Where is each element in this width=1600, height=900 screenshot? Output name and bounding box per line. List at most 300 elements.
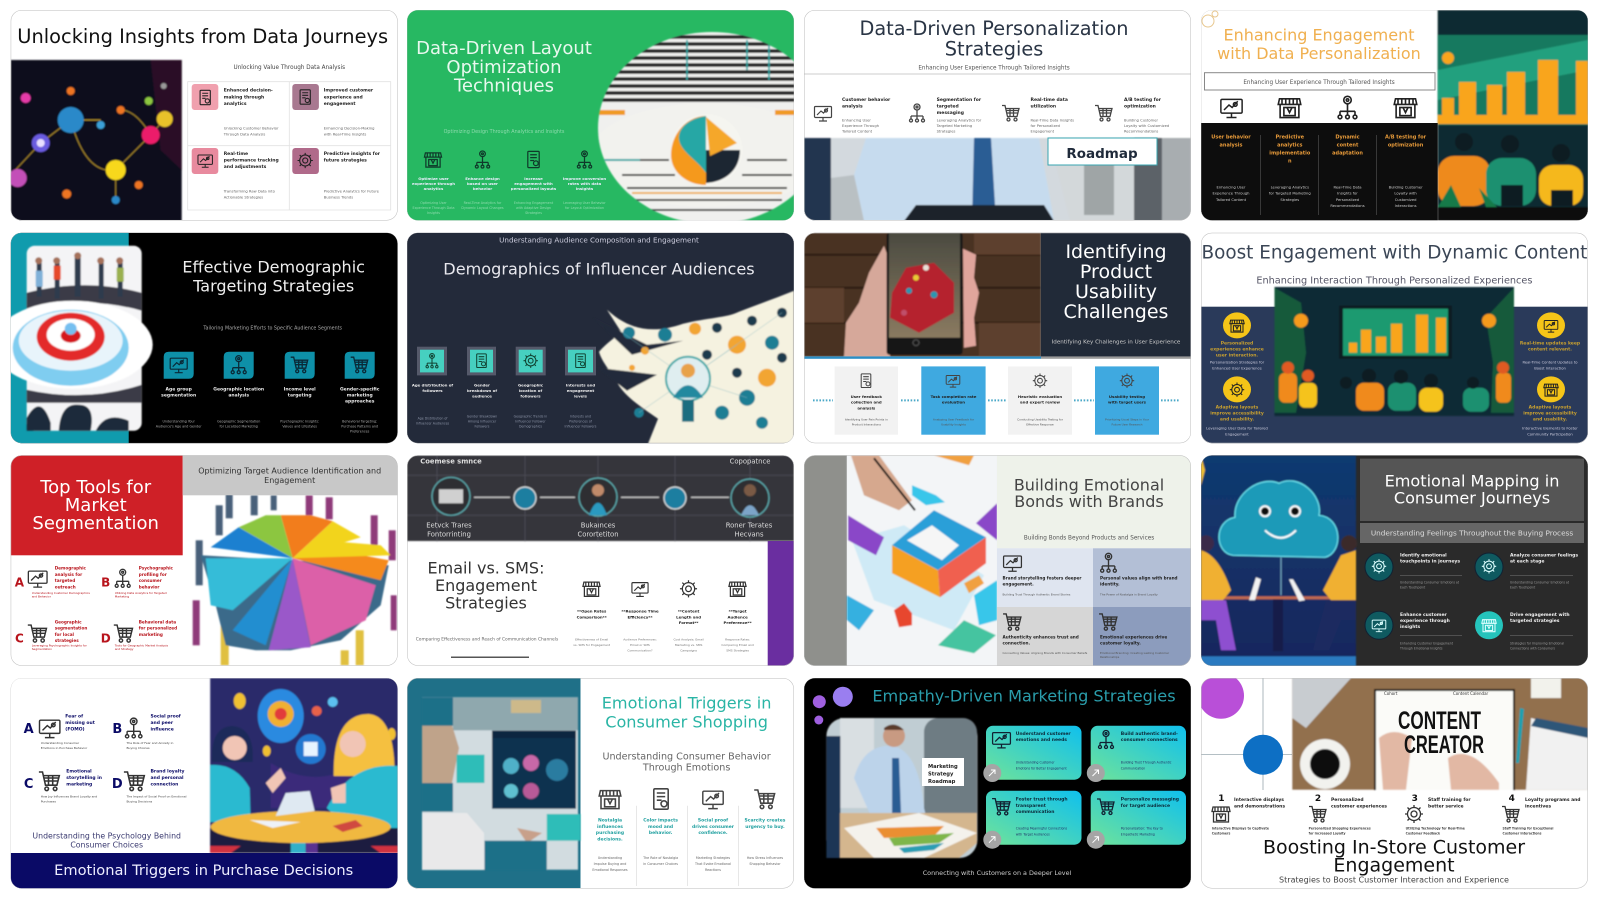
- dark panel with four columns: Insights for: [1337, 192, 1358, 196]
- value cells: Brand storytelling fosters deeper: [1002, 576, 1081, 581]
- tool items A-D: [15, 566, 177, 651]
- subtitle: Enhancing User Experience Through Tailored Insights: [918, 65, 1070, 71]
- strategy items: Engagement: [1030, 130, 1055, 134]
- strategy items: messaging: [937, 110, 964, 116]
- trigger items A-D: Social proof: [150, 714, 181, 719]
- steps: Increase: [524, 176, 543, 181]
- side items: Community Participation: [1527, 432, 1573, 436]
- strategy items: utilization: [1030, 104, 1056, 110]
- challenge cards: Effective Response: [1026, 422, 1054, 426]
- photo: flow diagram on dark wall: Coemese smnce: [420, 458, 482, 466]
- title area: [997, 455, 1191, 548]
- photo: flow diagram on dark wall: [407, 455, 794, 541]
- trigger items A-D: How Joy Influences Brand Loyalty and: [41, 794, 97, 798]
- demographic cards: Geographic Trends in: [514, 415, 547, 419]
- panel: Boost Engagement with Dynamic Content: [1201, 233, 1588, 444]
- trigger items A-D: connection: [151, 782, 178, 788]
- demographic cards: Influencer Follower: [515, 420, 546, 424]
- steps: analytics: [424, 186, 444, 191]
- strategy items: Tailored Content: [841, 130, 873, 134]
- numbered tactics: Customers: [1212, 831, 1230, 835]
- strategy cards: emotions and needs: [1016, 737, 1067, 743]
- tool items A-D: for personalized: [139, 626, 177, 631]
- journey items: experience through: [1400, 618, 1450, 624]
- title panel: Identifying Key Challenges in User Experience: [1052, 340, 1181, 346]
- panel: Data-Driven Personalization Strategies: [804, 10, 1191, 221]
- strategy items: A/B testing for: [1124, 98, 1161, 103]
- numbered tactics: Customer Interactions: [1502, 831, 1542, 835]
- title box: [1360, 459, 1584, 521]
- trigger items A-D: Emotional: [66, 769, 92, 774]
- journey items: Each Touchpoint: [1400, 586, 1426, 590]
- strategy labels: segmentation: [161, 393, 196, 399]
- title band: Emotional Triggers in Purchase Decisions: [54, 862, 353, 879]
- trigger items A-D: (FOMO): [65, 727, 85, 733]
- title panel: Usability: [1075, 281, 1157, 303]
- demographic cards: Age Distribution of: [418, 417, 447, 421]
- photo: content creator notebook on desk: Cohort: [1384, 691, 1398, 696]
- comparison items: Cost Analysis: Email: [673, 637, 704, 641]
- panel: Emotional Mapping in Consumer Journeys: [1198, 455, 1588, 666]
- challenge cards: Usability testing: [1109, 394, 1145, 399]
- photo: marketing strategy roadmap: Marketing: [928, 764, 958, 770]
- steps: with Adaptive Design: [516, 206, 551, 210]
- title: Engagement: [1333, 855, 1455, 877]
- trigger items A-D: influence: [151, 727, 174, 733]
- subtitle: Consumer Choices: [70, 841, 143, 850]
- tool items A-D: Demographic: [55, 566, 86, 571]
- subtitle: Optimizing Design Through Analytics and Insights: [444, 129, 565, 135]
- trigger columns: [592, 789, 786, 886]
- dark panel with four columns: Leveraging Analytics: [1271, 185, 1309, 189]
- steps: Experience Through Data: [412, 206, 455, 210]
- title: Strategies: [445, 594, 527, 613]
- demographic cards: [412, 347, 597, 429]
- strategy labels: Behavioral Targeting:: [342, 420, 377, 424]
- strategy labels: analysis: [228, 393, 249, 399]
- subtitle: Unlocking Value Through Data Analysis: [234, 65, 345, 71]
- strategy items: optimization: [1124, 104, 1156, 110]
- benefits grid: Actionable Strategies: [224, 196, 263, 200]
- trigger items A-D: C: [24, 777, 33, 792]
- value cells: Connecting Values: Aligning Brands with Consumer Beliefs: [1002, 651, 1088, 655]
- strategy cards: Build authentic brand-: [1121, 732, 1178, 737]
- dark panel with four columns: A/B testing for: [1385, 135, 1426, 141]
- comparison items: Communication?: [627, 649, 653, 653]
- strategy items: Customer behavior: [842, 98, 890, 103]
- journey items: Identify emotional: [1400, 554, 1447, 559]
- numbered tactics: Staff training for: [1428, 798, 1471, 803]
- title area: Building Bonds Beyond Products and Services: [1024, 536, 1154, 542]
- challenge cards: Identifying User Pain Points in: [845, 417, 888, 421]
- trigger items A-D: Purchases: [41, 799, 56, 803]
- benefits grid: engagement: [324, 101, 356, 107]
- side items: Real-Time Content Updates to: [1522, 361, 1578, 365]
- tool items A-D: strategies: [55, 638, 79, 643]
- title: Emotional Triggers in: [602, 693, 771, 712]
- benefits grid: [188, 82, 391, 210]
- journey items: Strategies for Improving Emotional: [1510, 642, 1564, 646]
- strategy items: Segmentation for: [937, 98, 981, 103]
- trigger columns: Nostalgia: [598, 819, 622, 824]
- numbered tactics: better service: [1428, 803, 1464, 809]
- trigger columns: Marketing Strategies: [696, 856, 730, 860]
- trigger columns: Social proof: [698, 819, 728, 824]
- journey items: insights: [1400, 624, 1421, 630]
- title block: Market: [65, 495, 127, 516]
- comparison items: Comparison**: [577, 614, 607, 619]
- dark panel with four columns: n: [1288, 159, 1292, 165]
- subtitle box: Understanding Feelings Throughout the Buying Process: [1371, 528, 1573, 537]
- comparison items: vs. SMS for Engagement: [573, 643, 611, 647]
- value cells: Emotional Branding: Creating Lasting Customer: [1100, 651, 1169, 655]
- value cells: Building Trust Through Authentic Brand Stories: [1002, 593, 1071, 597]
- benefits grid: with Real-Time Insights: [324, 132, 366, 136]
- journey items: Understanding Consumer Emotions at: [1510, 581, 1569, 585]
- journey items: Each Touchpoint: [1510, 586, 1536, 590]
- journey items: at each stage: [1510, 559, 1544, 565]
- trigger columns: behavior.: [649, 830, 673, 836]
- benefits grid: performance tracking: [224, 158, 279, 164]
- strategy cards: for target audience: [1121, 803, 1170, 809]
- strategy labels: for Localized Marketing: [220, 425, 258, 429]
- value cells: Relationships: [1100, 655, 1120, 659]
- panel: Data-Driven Layout Optimization Techniques: [407, 10, 794, 220]
- illustration: pie chart in striped circle: [597, 31, 794, 220]
- comparison items: Audience Preferences:: [623, 637, 657, 641]
- subtitle: Through Emotions: [642, 763, 730, 774]
- demographic cards: location of: [519, 388, 542, 393]
- comparison items: **Response Time: [621, 609, 659, 614]
- title: Data-Driven Personalization: [860, 17, 1128, 40]
- trigger items A-D: D: [112, 777, 123, 792]
- demographic cards: Followers: [475, 425, 490, 429]
- subtitle band: Engagement: [264, 476, 315, 485]
- strategy labels: Psychographic Insights:: [280, 420, 319, 424]
- benefits grid: and adjustments: [224, 164, 267, 170]
- numbered tactics: and demonstrations: [1234, 803, 1285, 809]
- dark panel with four columns: Real-Time Data: [1334, 185, 1361, 189]
- trigger columns: The Role of Nostalgia: [643, 856, 678, 860]
- title: Empathy-Driven Marketing Strategies: [872, 687, 1176, 706]
- demographic cards: engagement: [567, 388, 594, 393]
- subtitle: Tailoring Marketing Efforts to Specific Audience Segments: [202, 326, 342, 332]
- steps: Optimizing User: [420, 201, 447, 205]
- strategy icons: [164, 352, 375, 379]
- challenge cards: Product Interactions: [852, 422, 881, 426]
- demographic cards: Demographics: [519, 425, 542, 429]
- journey items: touchpoints in journeys: [1400, 559, 1460, 565]
- tool items A-D: outreach: [55, 584, 76, 590]
- steps: Dynamic Layout Changes: [461, 206, 504, 210]
- steps: Strategies: [525, 211, 542, 215]
- tool items A-D: D: [101, 631, 111, 645]
- dark panel with four columns: Predictive: [1276, 135, 1304, 141]
- value cells: customer loyalty.: [1100, 640, 1141, 645]
- numbered tactics: for Increased Loyalty: [1309, 831, 1346, 835]
- benefits grid: Enhanced decision-: [224, 89, 273, 94]
- tool items A-D: segmentation: [55, 626, 87, 631]
- challenge cards: Prioritizing Usual Steps in Your: [1105, 417, 1149, 421]
- side items: and usability.: [1533, 417, 1567, 423]
- demographic cards: Geographic: [518, 382, 543, 387]
- strategy labels: approaches: [345, 399, 375, 405]
- strategy items: Loyalty with Customized: [1124, 124, 1169, 128]
- photo: content creator notebook on desk: [1292, 678, 1588, 790]
- panel: Building Emotional Bonds with Brands: [804, 455, 1191, 666]
- steps: Enhancing Engagement: [514, 201, 553, 205]
- numbered tactics: incentives: [1525, 803, 1551, 809]
- dark panel with four columns: Dynamic: [1335, 135, 1360, 141]
- strategy labels: marketing: [347, 393, 373, 399]
- comparison items: SMS Strategies: [726, 649, 749, 653]
- steps: personalized layouts: [511, 186, 557, 191]
- trigger items A-D: Buying Decisions: [127, 799, 153, 803]
- tool items A-D: consumer: [139, 578, 163, 583]
- benefits grid: Improved customer: [324, 89, 373, 94]
- strategy cards: consumer connections: [1121, 737, 1178, 743]
- decorative rings icon: [1202, 11, 1218, 27]
- trigger items A-D: storytelling in: [66, 775, 102, 781]
- value cells: Authenticity enhances trust and: [1002, 635, 1079, 640]
- challenge cards: Analyzing User Feedback for: [933, 417, 974, 421]
- strategy items: Strategies: [937, 130, 956, 134]
- trigger columns: urgency to buy.: [745, 824, 785, 830]
- challenge cards: evaluation: [942, 400, 965, 405]
- photo: flow diagram on dark wall: Roner Terates: [726, 521, 772, 529]
- photo: hand holding phone: [804, 233, 1041, 357]
- tool items A-D: Behavioral data: [139, 619, 176, 624]
- trigger items A-D: Emotions in Purchase Behavior: [41, 746, 88, 750]
- subtitle box: Enhancing User Experience Through Tailored Insights: [1243, 80, 1395, 86]
- photo: flow diagram on dark wall: Copopatnce: [730, 458, 770, 466]
- title panel: [1041, 233, 1192, 357]
- numbered tactics: 3: [1412, 794, 1418, 804]
- numbered tactics: 2: [1315, 794, 1321, 804]
- dark panel with four columns: for Targeted Marketing: [1269, 192, 1311, 196]
- side items: Real-time updates keep: [1520, 342, 1580, 347]
- subtitle band: [183, 455, 398, 495]
- tool items A-D: Tools for Geographic Market Analysis: [115, 643, 168, 647]
- trigger columns: Shopping Behavior: [749, 862, 781, 866]
- photo: flow diagram on dark wall: Corortetiton: [577, 531, 619, 539]
- challenge cards: with target users: [1108, 400, 1147, 405]
- side items: improve accessibility: [1210, 411, 1264, 417]
- photo: woman viewing analytics dashboard: [422, 697, 580, 871]
- photo: content creator notebook on desk: Content Calendar: [1453, 691, 1489, 696]
- trigger columns: Understanding: [598, 856, 622, 860]
- numbered tactics: Personalized Shopping Experiences: [1309, 827, 1371, 831]
- strategy cards: transparent: [1016, 803, 1047, 809]
- strategy cards: Understand customer: [1016, 732, 1071, 737]
- dark panel with four columns: User behavior: [1211, 135, 1251, 141]
- challenge cards: collection and: [851, 400, 882, 405]
- subtitle box: [1360, 523, 1584, 543]
- side items: experiences enhance: [1210, 346, 1264, 352]
- side items: Interactive Elements to Foster: [1522, 426, 1578, 430]
- benefits grid: Unlocking Customer Behavior: [224, 127, 279, 131]
- demographic cards: Among Influencer: [468, 420, 497, 424]
- numbered tactics: Interactive Displays to Captivate: [1212, 827, 1269, 831]
- tool items A-D: behavior: [139, 584, 160, 590]
- side items: Engagement: [1225, 432, 1249, 436]
- dark panel with four columns: optimization: [1388, 143, 1424, 149]
- strategy items: Real-Time Data Insights: [1030, 119, 1074, 123]
- dark panel with four columns: Recommendations: [1330, 204, 1365, 208]
- steps: rates with data: [568, 181, 602, 186]
- strategy cards: Communication: [1121, 766, 1145, 770]
- illustration: audience and chart: [1274, 287, 1514, 416]
- title box: Consumer Journeys: [1394, 489, 1550, 508]
- comparison items: Effectiveness of Email: [575, 637, 608, 641]
- benefits grid: Transforming Raw Data into: [224, 190, 275, 194]
- tool items A-D: and Behavior: [32, 594, 52, 598]
- strategy cards: Emotions for Better Engagement: [1016, 766, 1067, 770]
- value cells: engagement.: [1002, 581, 1034, 586]
- trigger items A-D: B: [112, 722, 122, 737]
- dark panel with four columns: Building Customer: [1389, 185, 1423, 189]
- steps: based on user: [467, 181, 498, 186]
- strategy items: Real-time data: [1030, 98, 1068, 103]
- subtitle band: Optimizing Target Audience Identification and: [198, 467, 381, 476]
- trigger columns: mood and: [648, 824, 673, 830]
- title panel: Challenges: [1064, 301, 1168, 323]
- steps: experience through: [412, 181, 455, 186]
- side items: Personalized: [1221, 341, 1253, 346]
- comparison items: Length and: [676, 614, 701, 619]
- photo: marketing strategy roadmap: Roadmap: [928, 779, 956, 785]
- comparison items: Efficiency**: [628, 614, 652, 619]
- strategy items: analysis: [842, 104, 863, 110]
- title block: Segmentation: [32, 513, 159, 534]
- strategy labels: Audience's Age and Gender: [156, 425, 202, 429]
- panel: Effective Demographic Targeting Strategies: [0, 233, 398, 444]
- steps: Leveraging User Behavior: [563, 201, 606, 205]
- illustration: two women talking over laptop: [210, 678, 398, 853]
- comparison items: Preference**: [724, 620, 752, 625]
- trigger columns: influences: [597, 824, 623, 830]
- subtitle: Comparing Effectiveness and Reach of Communication Channels: [416, 636, 559, 642]
- strategy cards: Empathetic Marketing: [1121, 832, 1155, 836]
- trigger items A-D: A: [24, 722, 34, 737]
- title: Techniques: [453, 76, 554, 97]
- illustration: data network: [9, 60, 182, 221]
- journey items: [1365, 553, 1578, 651]
- comparison items: Campaigns: [680, 649, 697, 653]
- steps: behavior: [473, 186, 492, 191]
- title: Engagement: [435, 576, 537, 595]
- strategy cards: communication: [1016, 809, 1054, 815]
- trigger columns: decisions.: [597, 836, 623, 842]
- journey items: Understanding Consumer Emotions at: [1400, 581, 1459, 585]
- value cells: The Power of Nostalgia in Brand Loyalty: [1099, 593, 1158, 597]
- side items: Enhanced User Experience: [1212, 367, 1263, 371]
- demographic cards: Preferences of: [569, 420, 593, 424]
- comparison items: Marketing vs. SMS: [675, 643, 702, 647]
- trigger columns: That Evoke Emotional: [694, 862, 731, 866]
- tool items A-D: Understanding Customer Demographics: [32, 591, 90, 595]
- subtitle: Understanding the Psychology Behind: [32, 831, 181, 840]
- steps: for Layout Optimization: [565, 206, 604, 210]
- steps: Enhance design: [465, 176, 500, 181]
- journey items: targeted strategies: [1510, 618, 1560, 624]
- numbered tactics: Customer Feedback: [1406, 831, 1441, 835]
- challenge cards: [835, 366, 1159, 435]
- tool items A-D: Segmentation: [32, 647, 52, 651]
- journey items: Through Emotional Insights: [1399, 647, 1443, 651]
- photo: marketing strategy roadmap: Strategy: [928, 772, 954, 778]
- panel: Enhancing Engagement with Data Personalization: [1201, 10, 1589, 221]
- comparison items: **Open Rates: [577, 609, 606, 614]
- tool items A-D: C: [15, 631, 24, 645]
- photo: marketing strategy roadmap: [826, 718, 977, 858]
- strategy cards: with Target Audiences: [1016, 832, 1050, 836]
- dark panel with four columns: analysis: [1220, 143, 1242, 149]
- strategy items: Targeted Marketing: [936, 124, 972, 128]
- title: Targeting Strategies: [192, 276, 354, 295]
- strategy labels: Gender-specific: [340, 388, 379, 393]
- trigger columns: purchasing: [596, 830, 624, 836]
- journey items: Drive engagement with: [1510, 613, 1570, 618]
- benefits grid: Predictive Analytics for Future: [324, 190, 379, 194]
- subtitle: Understanding Audience Composition and Engagement: [499, 235, 699, 244]
- connector dots: [813, 399, 1180, 401]
- benefits grid: Predictive insights for: [324, 152, 380, 157]
- trigger columns: Color impacts: [643, 819, 678, 824]
- title: Boost Engagement with Dynamic Content: [1201, 243, 1587, 264]
- title: Data-Driven Layout: [416, 38, 592, 59]
- photo: man at roadmap board: [804, 138, 1191, 221]
- tool items A-D: A: [15, 575, 25, 589]
- icons row: [1221, 96, 1417, 119]
- demographic cards: Gender Breakdown: [467, 415, 497, 419]
- photo: flow diagram on dark wall: Bukaınces: [581, 521, 615, 529]
- numbered tactics: 1: [1218, 794, 1225, 804]
- tool items A-D: for local: [55, 632, 75, 637]
- trigger columns: in Consumer Choices: [643, 862, 678, 866]
- trigger items A-D: and peer: [151, 720, 174, 726]
- comparison items: Format**: [679, 620, 698, 625]
- strategy labels: Age group: [166, 388, 192, 393]
- tool items A-D: Marketing: [115, 594, 129, 598]
- challenge cards: Future User Research: [1112, 422, 1143, 426]
- panel: Email vs. SMS Engagement Strategies: [407, 455, 795, 666]
- title block: [11, 455, 183, 555]
- trigger columns: Scarcity creates: [745, 819, 785, 824]
- trigger columns: confidence.: [698, 830, 728, 836]
- benefits grid: experience and: [324, 94, 363, 100]
- benefits grid: future strategies: [324, 158, 367, 164]
- demographic cards: Influencer Audiences: [416, 422, 450, 426]
- dark panel with four columns: adaptation: [1332, 151, 1363, 157]
- photo: flow diagram on dark wall: Hecvans: [734, 531, 764, 539]
- panel: Emotional Triggers in Purchase Decisions: [11, 678, 398, 889]
- numbered tactics: Staff Training for Exceptional: [1502, 827, 1553, 831]
- title: Enhancing Engagement: [1223, 26, 1415, 45]
- illustration: bar chart and audience: [1438, 10, 1589, 221]
- steps: [412, 151, 606, 215]
- strategy labels: Values and Lifestyles: [282, 425, 317, 429]
- title: Effective Demographic: [182, 258, 365, 277]
- title: Demographics of Influencer Audiences: [443, 259, 755, 278]
- side items: Leveraging User Data for Tailored: [1206, 426, 1268, 430]
- trigger columns: drives consumer: [692, 824, 735, 830]
- challenge cards: analysis: [857, 405, 876, 410]
- trigger items A-D: Buying Choices: [127, 746, 150, 750]
- strategy items: [814, 97, 1169, 134]
- title: Boosting In-Store Customer: [1263, 836, 1525, 858]
- comparison items: Comparing Email and: [721, 643, 754, 647]
